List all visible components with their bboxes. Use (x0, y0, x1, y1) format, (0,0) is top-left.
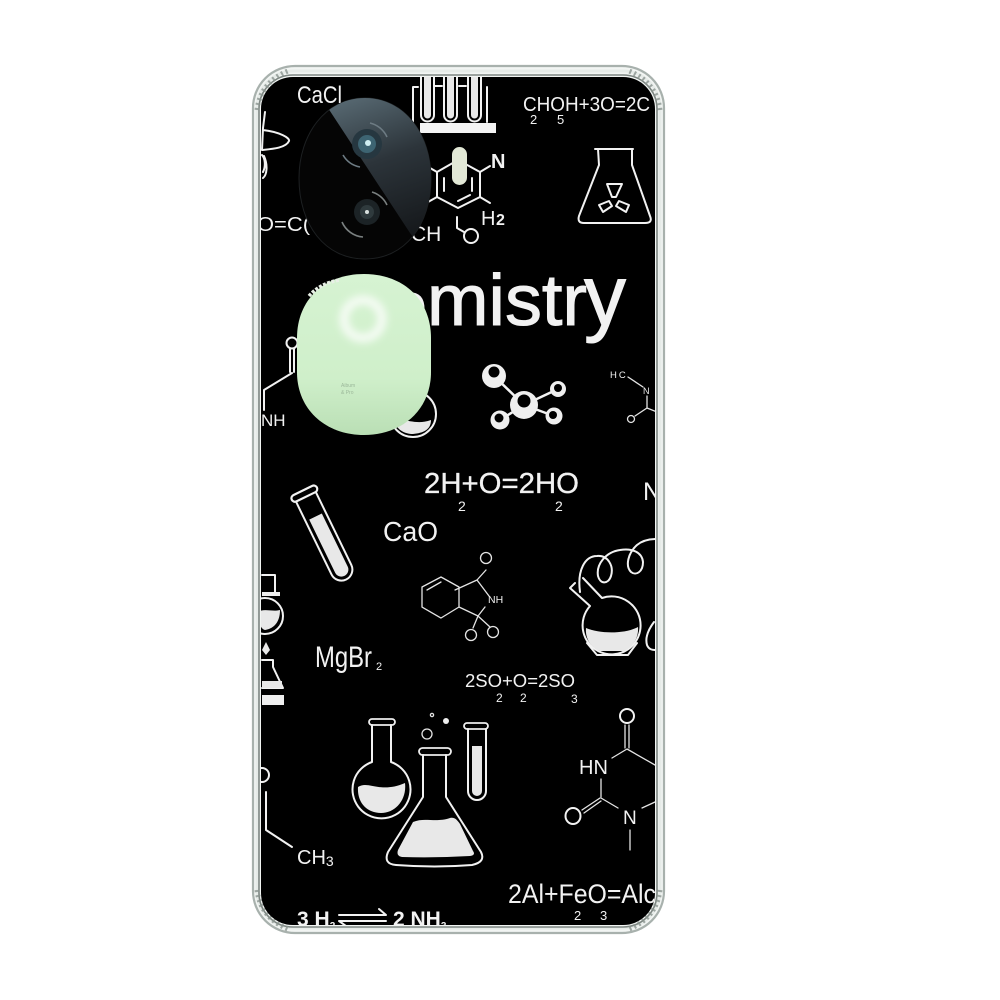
equation: 2Al+FeO=Al: 2Al+FeO=Alc (508, 879, 656, 909)
molecule: left amide fragment (261, 338, 298, 430)
equation: 3H2 to 2NH3: 3 (441, 921, 447, 932)
formula fragment: N: N (643, 478, 661, 506)
formula: CHOH+3O=2C (524, 97, 650, 124)
chalk fragment over module edge (309, 280, 340, 296)
tiny module text: Aibum (341, 383, 355, 389)
molecule: left amide fragment: NH (261, 411, 286, 430)
upper lens (343, 123, 387, 167)
equation: 3H2 to 2NH3: 2 NH (393, 908, 441, 931)
formula: MgBr2: MgBr (315, 641, 372, 674)
molecule: HC N ring fragment (610, 370, 657, 422)
equation: 3H2 to 2NH3: 2 (330, 921, 336, 932)
equation: 2Al+FeO=Al: 2 (574, 908, 581, 923)
formula: CHOH+3O=2C: 5 (557, 112, 564, 127)
molecule: uracil derivative: N (623, 808, 637, 829)
equation: 2H2+O=2H2O: 2 (458, 498, 466, 514)
icon: test tube rack (413, 72, 496, 133)
equation: 2SO2+O2=2SO3: 3 (571, 692, 578, 706)
equation: 3H2 to 2NH3 (298, 908, 446, 925)
equation: 3H2 to 2NH3: 3 H (297, 908, 330, 931)
icon: top-left flask fragment (262, 112, 289, 178)
molecule: CH3 chain (255, 768, 334, 869)
flash (452, 147, 467, 185)
lower lens (342, 192, 387, 237)
formula fragment: O=C: O=C( (257, 214, 310, 236)
icon: flask with trefoil symbol (579, 149, 651, 223)
molecule: benzene ring with N, H2, CH, O: CH (411, 223, 441, 246)
molecule: benzene ring with N, H2, CH, O (411, 151, 505, 246)
tiny module text (341, 383, 355, 396)
molecule: benzene ring with N, H2, CH, O: N (491, 151, 505, 173)
molecule: CH3 chain: CH (297, 847, 326, 869)
formula: MgBr2: 2 (376, 661, 382, 673)
chalk title: Chemistry: mistr (427, 261, 587, 341)
equation: 2H2+O=2H2O: 2 (555, 498, 563, 514)
equation: 2SO2+O2=2SO3: 2 (520, 691, 527, 705)
formula: CaO: CaO (383, 516, 438, 547)
icon: upright test tube (464, 723, 488, 800)
molecule: saccharin (422, 552, 503, 640)
icon: round bottom flask (353, 719, 410, 818)
icon: left round flask on stand (261, 574, 284, 705)
tiny module text: & Pro (341, 390, 354, 396)
equation: 2H2+O=2H2O (425, 472, 578, 511)
transparent case frame (253, 66, 664, 933)
molecule: HC N ring fragment: N (643, 386, 650, 396)
equation: 2SO2+O2=2SO3: 2SO+O=2SO (465, 671, 575, 691)
molecule: benzene ring with N, H2, CH, O: 2 (496, 212, 505, 229)
equation: 2Al+FeO=Al: 3 (600, 908, 607, 923)
molecule: uracil derivative: HN (579, 757, 608, 779)
formula: CHOH+3O=2C: CHOH+3O=2C (523, 94, 650, 116)
equation: 2H2+O=2H2O: 2H+O=2HO (424, 468, 579, 500)
printed chemistry artwork (247, 72, 661, 932)
phone case product image (252, 64, 666, 934)
formula: CaCl: CaCl (297, 82, 342, 109)
icon: round flask behind module (394, 394, 437, 438)
icon: flask with coiled condenser (570, 539, 657, 655)
icon: ball and stick molecule (482, 364, 566, 430)
black printed back panel (261, 77, 655, 925)
ring light highlight (344, 300, 382, 338)
chalk title: Chemistry: y (584, 248, 626, 344)
green phone module (297, 274, 431, 435)
equation: 2SO2+O2=2SO3 (466, 674, 578, 703)
equation: 2Al+FeO=Al (509, 884, 655, 920)
camera module (298, 98, 432, 260)
icon: Erlenmeyer flask (387, 748, 482, 866)
chalk title: Chemistry: Che (312, 271, 427, 338)
equation: 2SO2+O2=2SO3: 2 (496, 691, 503, 705)
molecule: uracil derivative (566, 709, 655, 850)
chalk title: Chemistry (413, 272, 626, 344)
icon: angled test tube (290, 484, 354, 582)
molecule: HC N ring fragment: HC (610, 370, 628, 381)
molecule: saccharin: NH (488, 594, 503, 606)
icon: bubbles (422, 713, 449, 739)
molecule: benzene ring with N, H2, CH, O: H (481, 208, 495, 230)
camera glass reflection (329, 98, 431, 236)
formula: CHOH+3O=2C: 2 (530, 112, 537, 127)
molecule: CH3 chain: 3 (326, 853, 334, 869)
